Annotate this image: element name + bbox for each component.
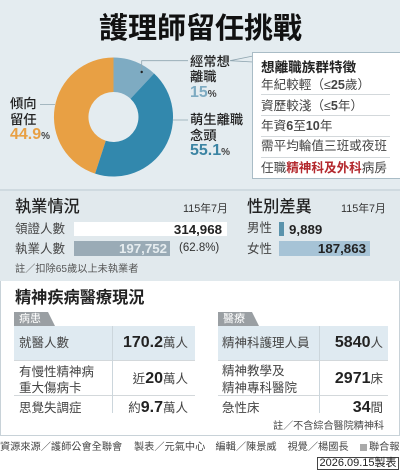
label: often thinks of leaving: 離職 (190, 69, 217, 84)
credits line: 編輯／陳景威 (216, 442, 277, 452)
credits line: 資源來源／護師公會全聯會 (0, 442, 122, 452)
label: thought of leaving: 萌生離職 (190, 112, 243, 127)
heading: psychiatric care status: 精神疾病醫療現況 (15, 288, 144, 306)
tab: medical care (218, 312, 259, 326)
row: chronic cards: 有慢性精神病 (19, 365, 94, 379)
label: often thinks of leaving (190, 54, 230, 101)
row: chronic cards: 重大傷病卡 (19, 381, 82, 395)
row: licensed count: 314,968 (174, 222, 222, 236)
row: less seniority: 資歷較淺（≤5年） (261, 99, 363, 113)
credits line: 視覺／楊國長 (288, 442, 349, 452)
label: tends to stay (10, 96, 50, 143)
row: psychiatric nurses: 精神科護理人員 (222, 336, 310, 350)
row: acute beds (222, 399, 383, 416)
title: 護理師留任挑戰 (99, 13, 302, 45)
leader lines (40, 56, 252, 120)
bar: male (279, 222, 284, 236)
note: excludes general hospital psychiatry: 註／不含綜合醫院精神科 (273, 421, 384, 432)
row: chronic cards (19, 365, 188, 395)
bar: female (279, 241, 370, 256)
row: female: 187,863 (318, 241, 366, 256)
row: psychiatric hospitals (222, 364, 383, 395)
row: employed count: (62.8%) (179, 242, 219, 254)
row: patients treated (14, 326, 195, 360)
row: male: 9,889 (289, 222, 322, 236)
tab: patients: 病患 (19, 312, 41, 324)
row: patients treated: 就醫人數 (19, 336, 69, 350)
heading: gender difference: 性別差異 (247, 198, 312, 216)
heading: leaver characteristics: 想離職族群特徵 (261, 60, 356, 75)
label: thought of leaving (190, 112, 243, 159)
row: acute beds: 34間 (353, 399, 383, 416)
label: tends to stay: 傾向 (10, 96, 37, 111)
row: male (247, 221, 322, 236)
row: psychiatric nurses: 5840人 (335, 334, 383, 351)
row: psychiatric nurses (218, 326, 388, 360)
row: schizophrenia: 約9.7萬人 (128, 399, 188, 416)
panel: employment background (0, 191, 400, 281)
table: patients (14, 326, 195, 416)
table: medical care (218, 326, 388, 416)
row: schizophrenia: 思覺失調症 (19, 400, 82, 414)
credits line (0, 441, 400, 452)
row: licensed count: 領證人數 (15, 222, 65, 236)
row: employed count (15, 241, 219, 256)
row: 6 to 10 years: 年資6至10年 (261, 119, 332, 133)
chart: donut retention (54, 58, 174, 176)
tab: medical care: 醫療 (223, 312, 245, 324)
bar: licensed (74, 222, 227, 236)
label: often thinks of leaving: 經常想 (190, 54, 230, 69)
row: shift work: 需平均輪值三班或夜班 (261, 139, 387, 153)
row: younger age: 年紀較輕（≤25歲） (261, 78, 370, 92)
date stamp: 2026.09.15製表 (319, 457, 397, 469)
date: gender: 115年7月 (341, 202, 386, 214)
row: female (247, 241, 370, 256)
tab: patients (14, 312, 55, 326)
heading: employment status: 執業情況 (15, 198, 80, 216)
row: psychiatric hospitals: 2971床 (335, 370, 383, 387)
row: acute beds: 急性床 (222, 400, 260, 414)
credits line: 聯合報 (369, 442, 400, 452)
label: thought of leaving: 55.1% (190, 142, 230, 159)
label: thought of leaving: 念頭 (190, 128, 217, 143)
row: patients treated: 170.2萬人 (123, 334, 188, 351)
row: female: 女性 (247, 242, 272, 256)
row: schizophrenia (19, 399, 188, 416)
row: licensed count (15, 222, 227, 236)
row: male: 男性 (247, 221, 272, 235)
row: psychiatric hospitals: 精神教學及 (222, 364, 285, 378)
row: employed count: 執業人數 (15, 242, 65, 256)
panel: psychiatric care (0, 281, 400, 436)
panel: top background (0, 0, 400, 191)
label: often thinks of leaving: 15% (190, 84, 217, 101)
label: tends to stay: 44.9% (10, 126, 50, 143)
row: employed count: 197,752 (119, 241, 167, 256)
date: employment: 115年7月 (183, 202, 228, 214)
row: psychiatric hospitals: 精神專科醫院 (222, 381, 297, 395)
label: tends to stay: 留任 (10, 112, 37, 127)
credits line: 製表／元氣中心 (134, 442, 205, 452)
note: excluding over 65: 註／扣除65歲以上未執業者 (15, 264, 138, 275)
row: psychiatry and surgery wards: 任職精神科及外科病房 (261, 161, 387, 175)
row: chronic cards: 近20萬人 (133, 370, 188, 387)
bar: employed (74, 241, 170, 256)
panel: leaver characteristics (252, 52, 400, 179)
